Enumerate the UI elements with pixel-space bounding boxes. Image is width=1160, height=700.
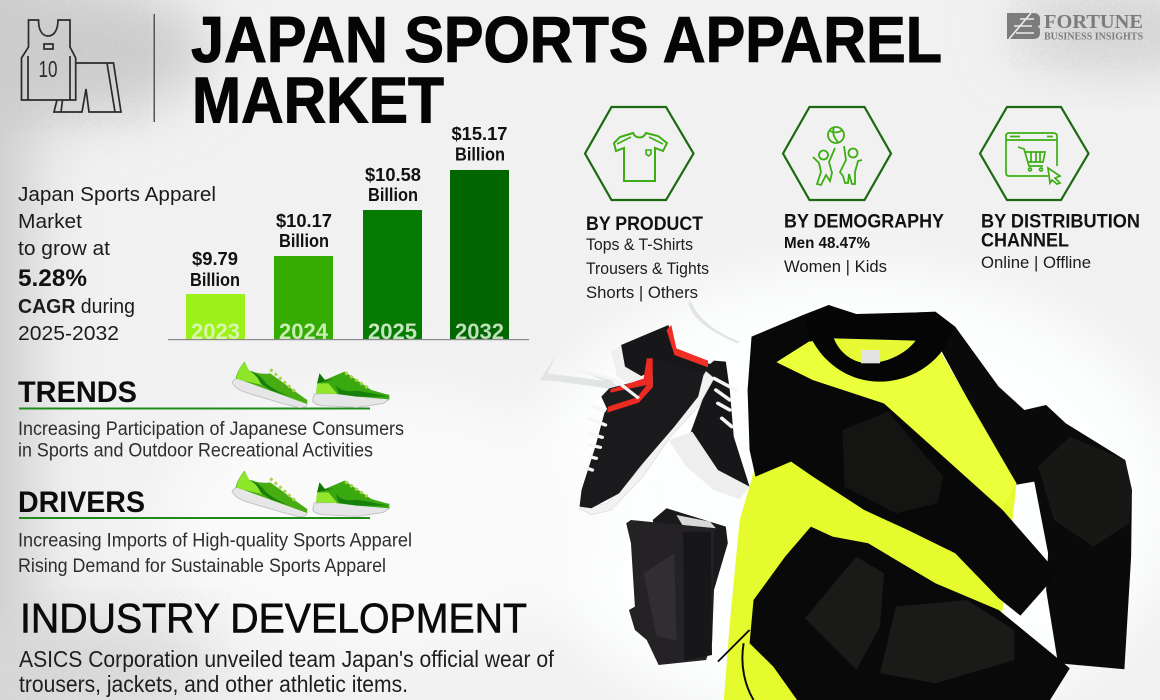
panel: industry development (19, 594, 555, 697)
icon: green sneakers (232, 362, 389, 407)
CAGR text block: 5.28% (18, 265, 87, 292)
bar 2032 (450, 124, 509, 344)
CAGR text block: Market (18, 211, 82, 233)
panel: industry development: ASICS Corporation unveiled team Japan's official wear of (19, 646, 555, 672)
panel: by product (585, 107, 709, 302)
bar 2025: Billion (368, 185, 418, 205)
bar 2025 (363, 165, 422, 344)
icon: jersey and shorts (22, 20, 121, 112)
CAGR text block: Japan Sports Apparel (18, 184, 216, 206)
logo: Fortune Business Insights: FORTUNE (1044, 11, 1143, 33)
bar 2032: $15.17 (452, 124, 508, 144)
panel: by distribution channel: CHANNEL (981, 230, 1069, 252)
jersey (724, 305, 1132, 700)
football boots (540, 300, 750, 515)
panel: drivers: Increasing Imports of High-quality Sports Apparel (18, 530, 412, 552)
bar 2023 (186, 249, 245, 344)
bar 2023: $9.79 (192, 249, 238, 269)
panel: by distribution channel: Online | Offline (981, 254, 1091, 272)
panel: drivers (18, 471, 412, 577)
panel: by demography: Men 48.47% (784, 235, 870, 252)
panel: by product: Trousers & Tights (586, 260, 709, 278)
collar (804, 305, 953, 382)
icon: online shopping cart hexagon (980, 107, 1088, 200)
bar 2024: $10.17 (276, 211, 332, 231)
bar 2025: 2025 (368, 319, 417, 344)
bar 2032: Billion (455, 144, 505, 164)
panel: trends: Increasing Participation of Japanese Consumers (18, 419, 404, 440)
panel: drivers: Rising Demand for Sustainable Sports Apparel (18, 556, 386, 577)
title: MARKET (192, 64, 444, 136)
icon: t-shirt hexagon (585, 107, 694, 200)
CAGR text block (18, 184, 216, 345)
panel: trends: TRENDS (18, 376, 137, 409)
bar 2024 (274, 211, 333, 344)
front sleeve (748, 305, 1058, 616)
panel: drivers: DRIVERS (18, 486, 145, 519)
bar chart (168, 124, 529, 344)
panel: by demography: BY DEMOGRAPHY (784, 210, 944, 232)
front boot (580, 372, 714, 515)
panel: by product: Shorts | Others (586, 284, 698, 302)
panel: trends: in Sports and Outdoor Recreational Activities (18, 440, 373, 462)
bar 2024: 2024 (279, 319, 329, 344)
bar 2032: 2032 (455, 319, 504, 344)
yellow torso (724, 347, 1016, 700)
panel: by product: Tops & T-Shirts (586, 236, 693, 254)
CAGR text block: 2025-2032 (18, 323, 119, 345)
bar 2025: $10.58 (365, 165, 421, 185)
right sleeve (935, 327, 1132, 669)
pants (718, 527, 1070, 700)
panel: by demography: Women | Kids (784, 258, 887, 276)
panel: industry development: INDUSTRY DEVELOPMENT (20, 594, 527, 642)
icon: jersey and shorts: 10 (38, 56, 58, 82)
photo: sports kit (540, 300, 1132, 700)
divider (154, 14, 155, 122)
icon: green sneakers (232, 471, 389, 516)
logo: Fortune Business Insights: BUSINESS INSIGHTS (1044, 32, 1143, 42)
panel: industry development: trousers, jackets, and other athletic items. (19, 671, 408, 697)
panel: by distribution channel (980, 107, 1140, 272)
panel: trends (18, 362, 404, 462)
shin guard (626, 508, 728, 665)
panel: by product: BY PRODUCT (586, 213, 703, 235)
panel: by distribution channel: BY DISTRIBUTION (981, 210, 1140, 232)
title: JAPAN SPORTS APPAREL (191, 3, 942, 76)
back boot (621, 325, 750, 487)
CAGR text block: CAGR during (18, 296, 135, 318)
CAGR text block: to grow at (18, 238, 110, 260)
bar 2023: Billion (190, 270, 240, 290)
bar 2024: Billion (279, 231, 329, 251)
icon: children playing hexagon (783, 107, 891, 200)
panel: by demography (783, 107, 944, 276)
bar 2023: 2023 (191, 319, 240, 344)
title (191, 3, 942, 136)
logo: Fortune Business Insights (1007, 11, 1143, 42)
